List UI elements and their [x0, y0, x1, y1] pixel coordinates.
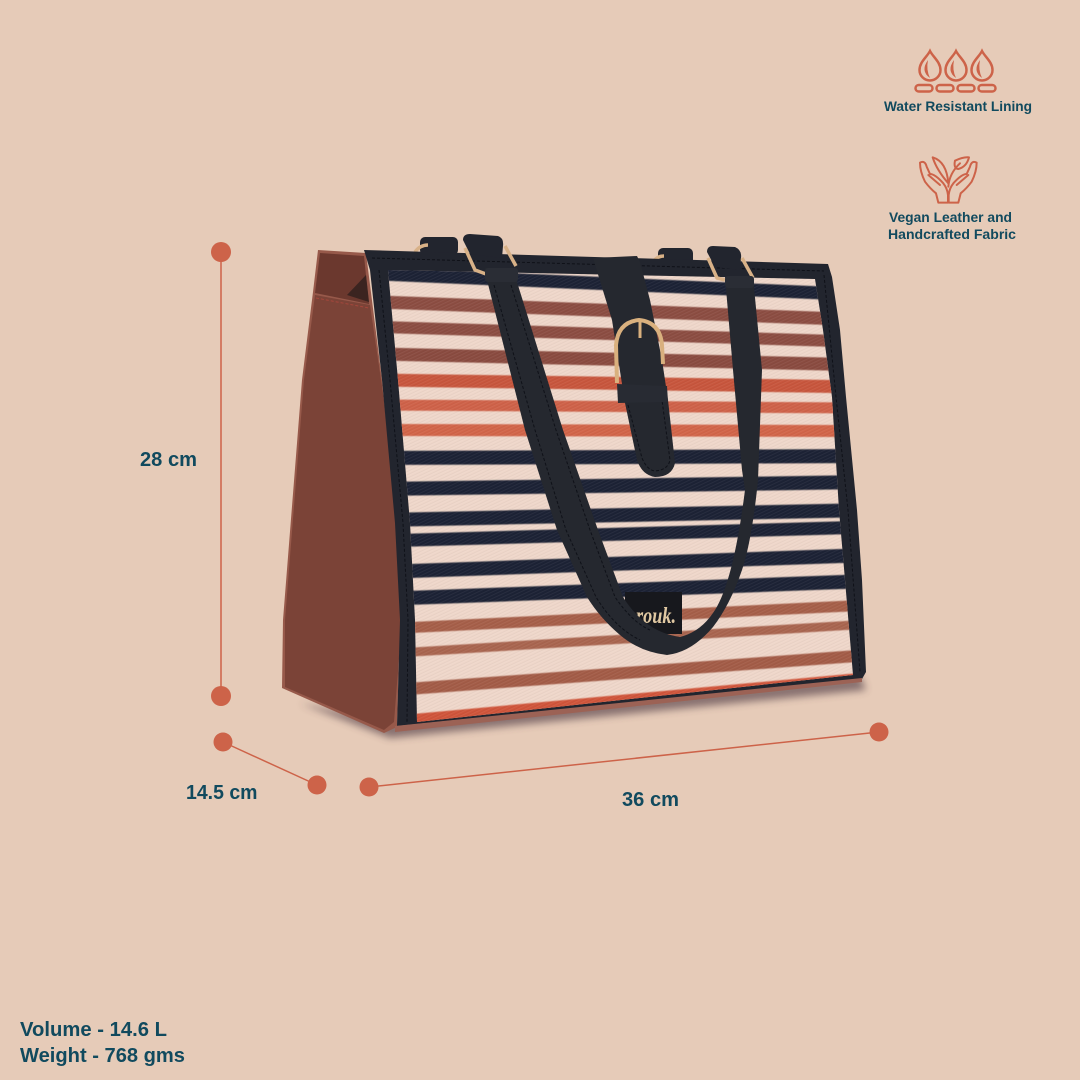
bag ground shadow — [300, 676, 866, 738]
brand label — [625, 592, 682, 634]
dimension: width — [360, 722, 888, 811]
dimension: height: 28 cm — [140, 449, 197, 471]
dimension: height — [140, 242, 231, 706]
brand label: rouk. — [636, 603, 676, 628]
volume and weight text: Volume - 14.6 L — [20, 1018, 167, 1041]
buckle strap — [593, 256, 675, 477]
frame stitching — [372, 258, 860, 722]
bag front frame — [364, 250, 866, 726]
dimension: width: 36 cm — [622, 789, 679, 811]
gold buckle — [616, 320, 663, 383]
icon: hands with leaves — [920, 157, 977, 203]
vegan leather label — [888, 209, 1016, 242]
volume and weight text — [20, 1018, 185, 1067]
vegan leather label: Vegan Leather and — [889, 209, 1012, 225]
shoulder strap — [485, 268, 762, 655]
dimension: depth: 14.5 cm — [186, 782, 258, 804]
buckle keeper loop — [617, 384, 668, 403]
front handle tabs and rings — [463, 234, 754, 288]
volume and weight text: Weight - 768 gms — [20, 1044, 185, 1067]
dimension: depth — [186, 732, 326, 804]
product photo: tote bag — [282, 234, 870, 740]
vegan leather label: Handcrafted Fabric — [888, 226, 1016, 242]
water resistant label: Water Resistant Lining — [884, 98, 1032, 114]
striped fabric panel — [388, 270, 853, 722]
icon: water drops — [916, 51, 996, 92]
bag bottom trim — [395, 678, 862, 732]
bag side gusset — [282, 250, 402, 733]
bag back handle tabs — [415, 237, 693, 266]
